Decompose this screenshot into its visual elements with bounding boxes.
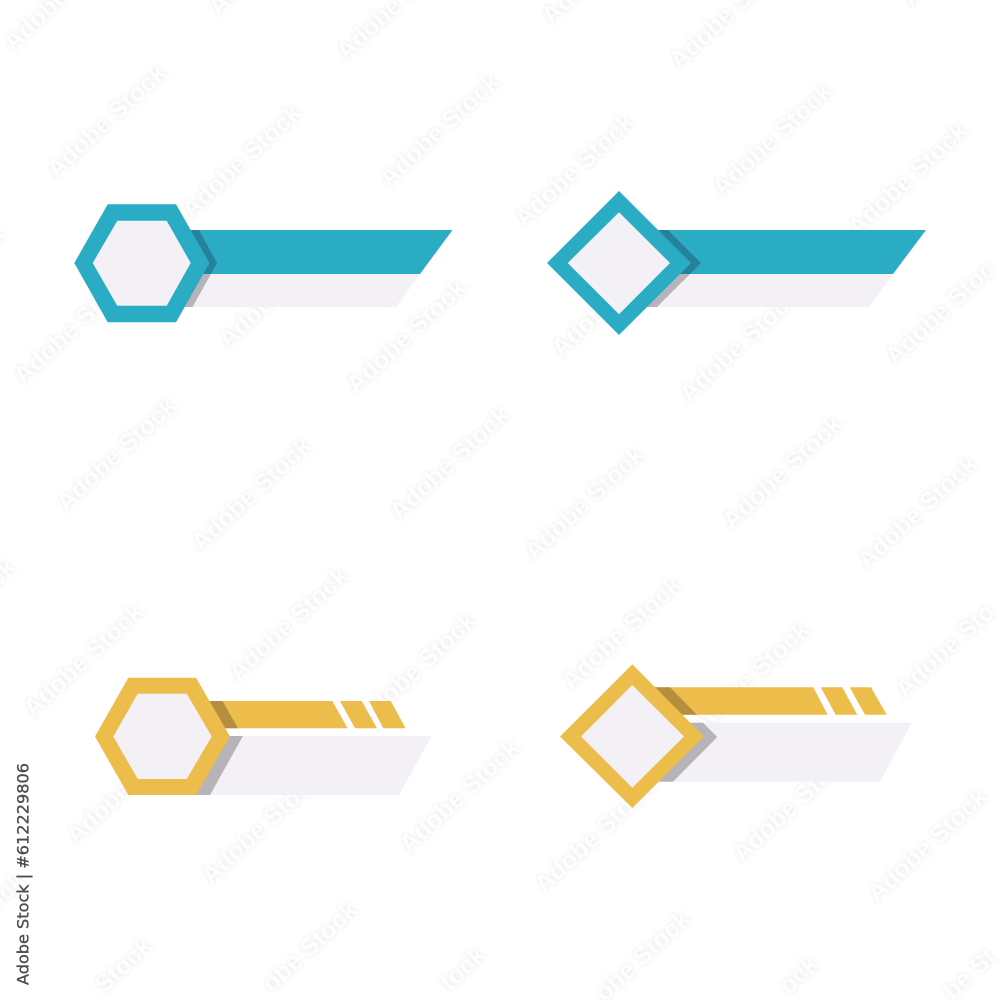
watermark pattern: Adobe Stock (862, 783, 993, 907)
watermark pattern: Adobe Stock (684, 616, 815, 740)
icon: teal hexagon inner (93, 221, 191, 306)
teal diamond banner: light lower bar (647, 274, 893, 307)
watermark pattern: Adobe Stock (374, 68, 505, 192)
watermark pattern: Adobe Stock (519, 441, 650, 565)
teal diamond banner: teal upper bar (640, 230, 926, 274)
watermark pattern: Adobe Stock (509, 108, 640, 232)
watermark pattern: Adobe Stock (842, 117, 973, 241)
teal hexagon banner: dark shadow on bar (170, 230, 217, 274)
watermark pattern: Adobe Stock (674, 283, 805, 407)
yellow hexagon banner: grey shadow on light bar (190, 736, 243, 795)
watermark pattern: Adobe Stock (717, 410, 848, 534)
teal hexagon banner: grey shadow on light bar (170, 274, 211, 307)
yellow diamond banner: upper bar with two stripes (650, 687, 887, 715)
panel: teal hexagon banner (74, 204, 453, 322)
stock id label: Adobe Stock | #612229806 (14, 763, 32, 985)
icon: yellow diamond frame (560, 664, 704, 808)
watermark pattern: Adobe Stock (394, 734, 525, 858)
icon: teal hexagon frame (74, 204, 210, 322)
icon: teal diamond frame (547, 191, 691, 335)
teal hexagon banner: light lower bar (184, 274, 420, 307)
watermark pattern: Adobe Stock (223, 562, 354, 686)
icon: teal diamond inner (568, 212, 670, 314)
icon: yellow hexagon inner (113, 694, 212, 779)
watermark pattern: Adobe Stock (51, 392, 182, 516)
teal diamond banner: grey shadow on light bar (640, 274, 690, 307)
watermark pattern: Adobe Stock (186, 432, 317, 556)
watermark pattern: Adobe Sto (890, 598, 1000, 703)
watermark pattern: Adobe Stock (529, 774, 660, 898)
yellow diamond banner: light lower bar (673, 723, 912, 782)
watermark pattern: obe Stock (257, 896, 363, 998)
watermark pattern: Adobe Stock (196, 765, 327, 889)
teal hexagon banner: teal upper bar (170, 230, 452, 274)
watermark pattern: Stock (89, 932, 158, 999)
yellow diamond banner: dark shadow on bar (645, 687, 697, 715)
panel: teal diamond banner (547, 191, 926, 335)
watermark pattern: Adobe Stock (8, 265, 139, 389)
watermark pattern: Adobe Stock (341, 274, 472, 398)
watermark pattern: Adobe Stock (556, 571, 687, 695)
yellow diamond banner: grey shadow on light bar (650, 723, 717, 782)
watermark pattern: Adobe Stock (18, 598, 149, 722)
yellow hexagon banner: dark shadow on bar (200, 701, 238, 728)
watermark pattern: Adobe Stock (384, 401, 515, 525)
panel: yellow diamond banner (560, 664, 912, 808)
watermark pattern: Adobe Stock (852, 450, 983, 574)
watermark pattern: Adobe Stock (351, 607, 482, 731)
watermark pattern: Adobe Stock (213, 229, 344, 353)
watermark pattern: Adobe Stock (707, 77, 838, 201)
yellow hexagon banner: light lower bar (210, 736, 432, 795)
watermark pattern: Adobe Stock (61, 725, 192, 849)
watermark pattern: ock (773, 950, 824, 1000)
yellow hexagon banner: upper bar with two stripes (200, 701, 406, 728)
watermark pattern: Adobe Stock (41, 59, 172, 183)
icon: yellow hexagon frame (95, 678, 230, 795)
watermark pattern: Adobe Stock (727, 743, 858, 867)
icon: yellow diamond inner (581, 685, 684, 788)
watermark pattern: Adobe Stock (546, 238, 677, 362)
watermark pattern: tock (434, 941, 491, 996)
watermark pattern: Adobe Stoc (880, 255, 1000, 370)
watermark pattern: Adobe Stock (176, 99, 307, 223)
teal diamond banner: dark shadow on bar (640, 230, 701, 274)
panel: yellow hexagon banner (95, 678, 432, 795)
